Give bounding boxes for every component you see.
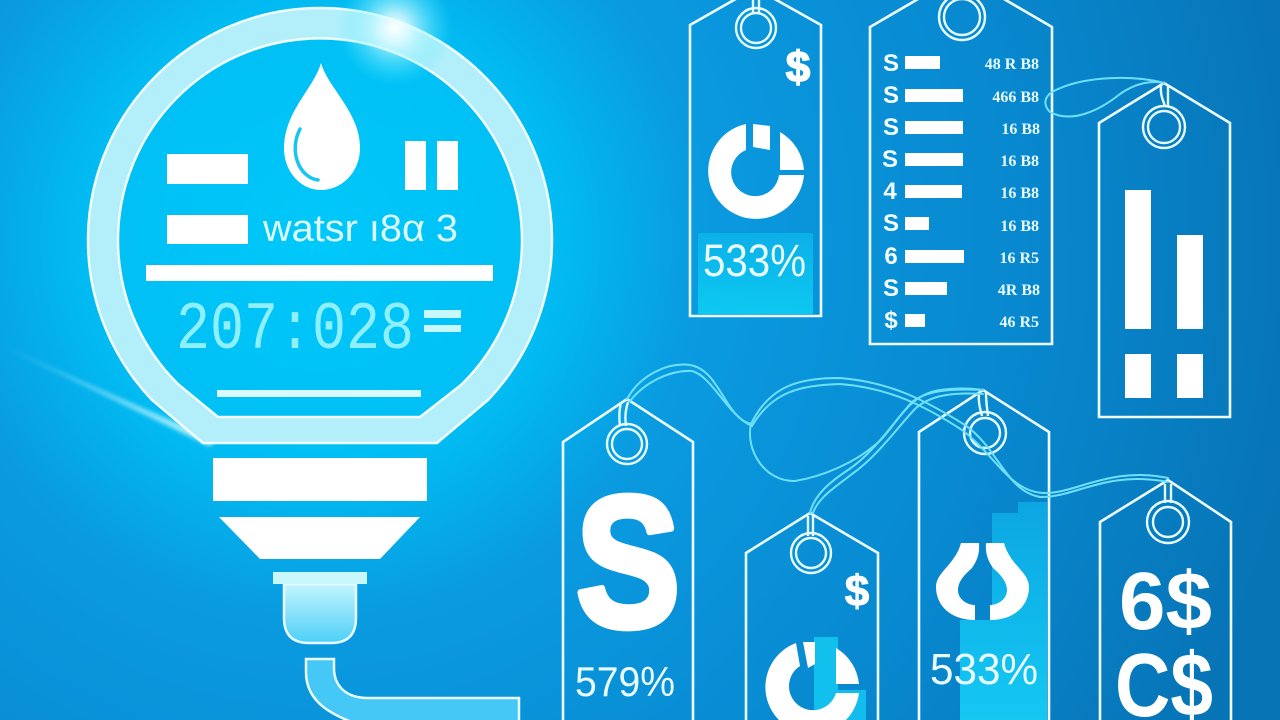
row symbols: S	[883, 275, 899, 302]
panel: water meter bulb	[88, 8, 552, 443]
base collar	[213, 458, 427, 501]
dollar icon: $	[845, 567, 869, 616]
percent label: 579%	[575, 658, 675, 705]
digital reading: 207:028	[176, 292, 414, 369]
panel: tag price list	[870, 0, 1052, 344]
tag eyelet	[964, 393, 1006, 454]
tag eyelet	[736, 0, 776, 48]
panel: tag horseshoe	[919, 390, 1049, 720]
panel: tag small donut	[746, 513, 878, 720]
row symbols	[882, 50, 899, 334]
row symbols: $	[884, 307, 898, 334]
tag outline	[563, 399, 693, 720]
row symbols: S	[883, 82, 899, 109]
tag teal fill	[698, 233, 813, 314]
bars	[1125, 190, 1203, 398]
row values	[985, 56, 1040, 331]
tag eyelet	[1147, 484, 1189, 543]
divider bar	[146, 265, 493, 281]
tag outline	[1100, 480, 1231, 720]
row values: 16 B8	[1000, 218, 1039, 235]
meter bar upper left	[167, 154, 248, 184]
base taper	[219, 517, 420, 559]
row symbols: S	[883, 114, 899, 141]
icon: split ring	[936, 543, 1029, 620]
donut chart	[765, 642, 859, 720]
row symbols: 4	[883, 178, 897, 205]
meter label: watsr ı8α 3	[262, 208, 458, 250]
icon: water drop	[284, 63, 360, 190]
tag outline	[1099, 83, 1230, 417]
row values: 16 R5	[999, 250, 1039, 267]
teal bars	[814, 637, 866, 720]
panel: tag dollars	[1100, 480, 1231, 720]
tag outline	[746, 513, 878, 720]
meter bar lower left	[167, 215, 248, 244]
dollar icon: $	[786, 43, 810, 92]
tag string	[1045, 78, 1164, 117]
row symbols: 6	[884, 243, 898, 270]
tag outline	[919, 390, 1049, 720]
row bars	[905, 56, 964, 327]
tag eyelet	[1143, 85, 1185, 148]
row values: 16 B8	[1001, 121, 1040, 138]
teal stair bars	[960, 502, 1047, 720]
panel: bulb base	[213, 458, 519, 720]
row values: 16 B8	[1000, 185, 1039, 202]
donut chart	[708, 124, 804, 219]
dollar text: 6$	[1119, 556, 1212, 647]
panel: tag big S	[563, 399, 693, 720]
socket	[273, 572, 367, 643]
tag outline	[870, 0, 1052, 344]
row symbols: S	[883, 50, 899, 77]
tag eyelet	[791, 516, 831, 573]
meter pause bars	[405, 141, 458, 190]
percent label: 533%	[930, 645, 1038, 694]
row values: 48 R B8	[985, 56, 1039, 73]
light streak	[0, 345, 215, 446]
panel: tag donut 53%	[690, 0, 821, 316]
lens flare	[337, 0, 453, 86]
row values: 16 B8	[1000, 153, 1039, 170]
row symbols: S	[882, 146, 898, 173]
lower bar	[217, 390, 421, 397]
row values: 466 B8	[992, 89, 1039, 106]
row values: 46 R5	[999, 314, 1039, 331]
bulb ring	[88, 8, 552, 443]
tag eyelet	[607, 402, 647, 464]
tag outline	[690, 0, 821, 316]
tag strings	[627, 365, 1168, 513]
water pipe	[306, 659, 519, 720]
panel: tag bar chart	[1045, 78, 1230, 417]
percent label: 533%	[703, 235, 806, 286]
big dollar S: S	[576, 459, 680, 666]
row symbols: S	[883, 210, 899, 237]
row values: 4R B8	[998, 282, 1040, 299]
tag eyelet	[939, 0, 985, 40]
